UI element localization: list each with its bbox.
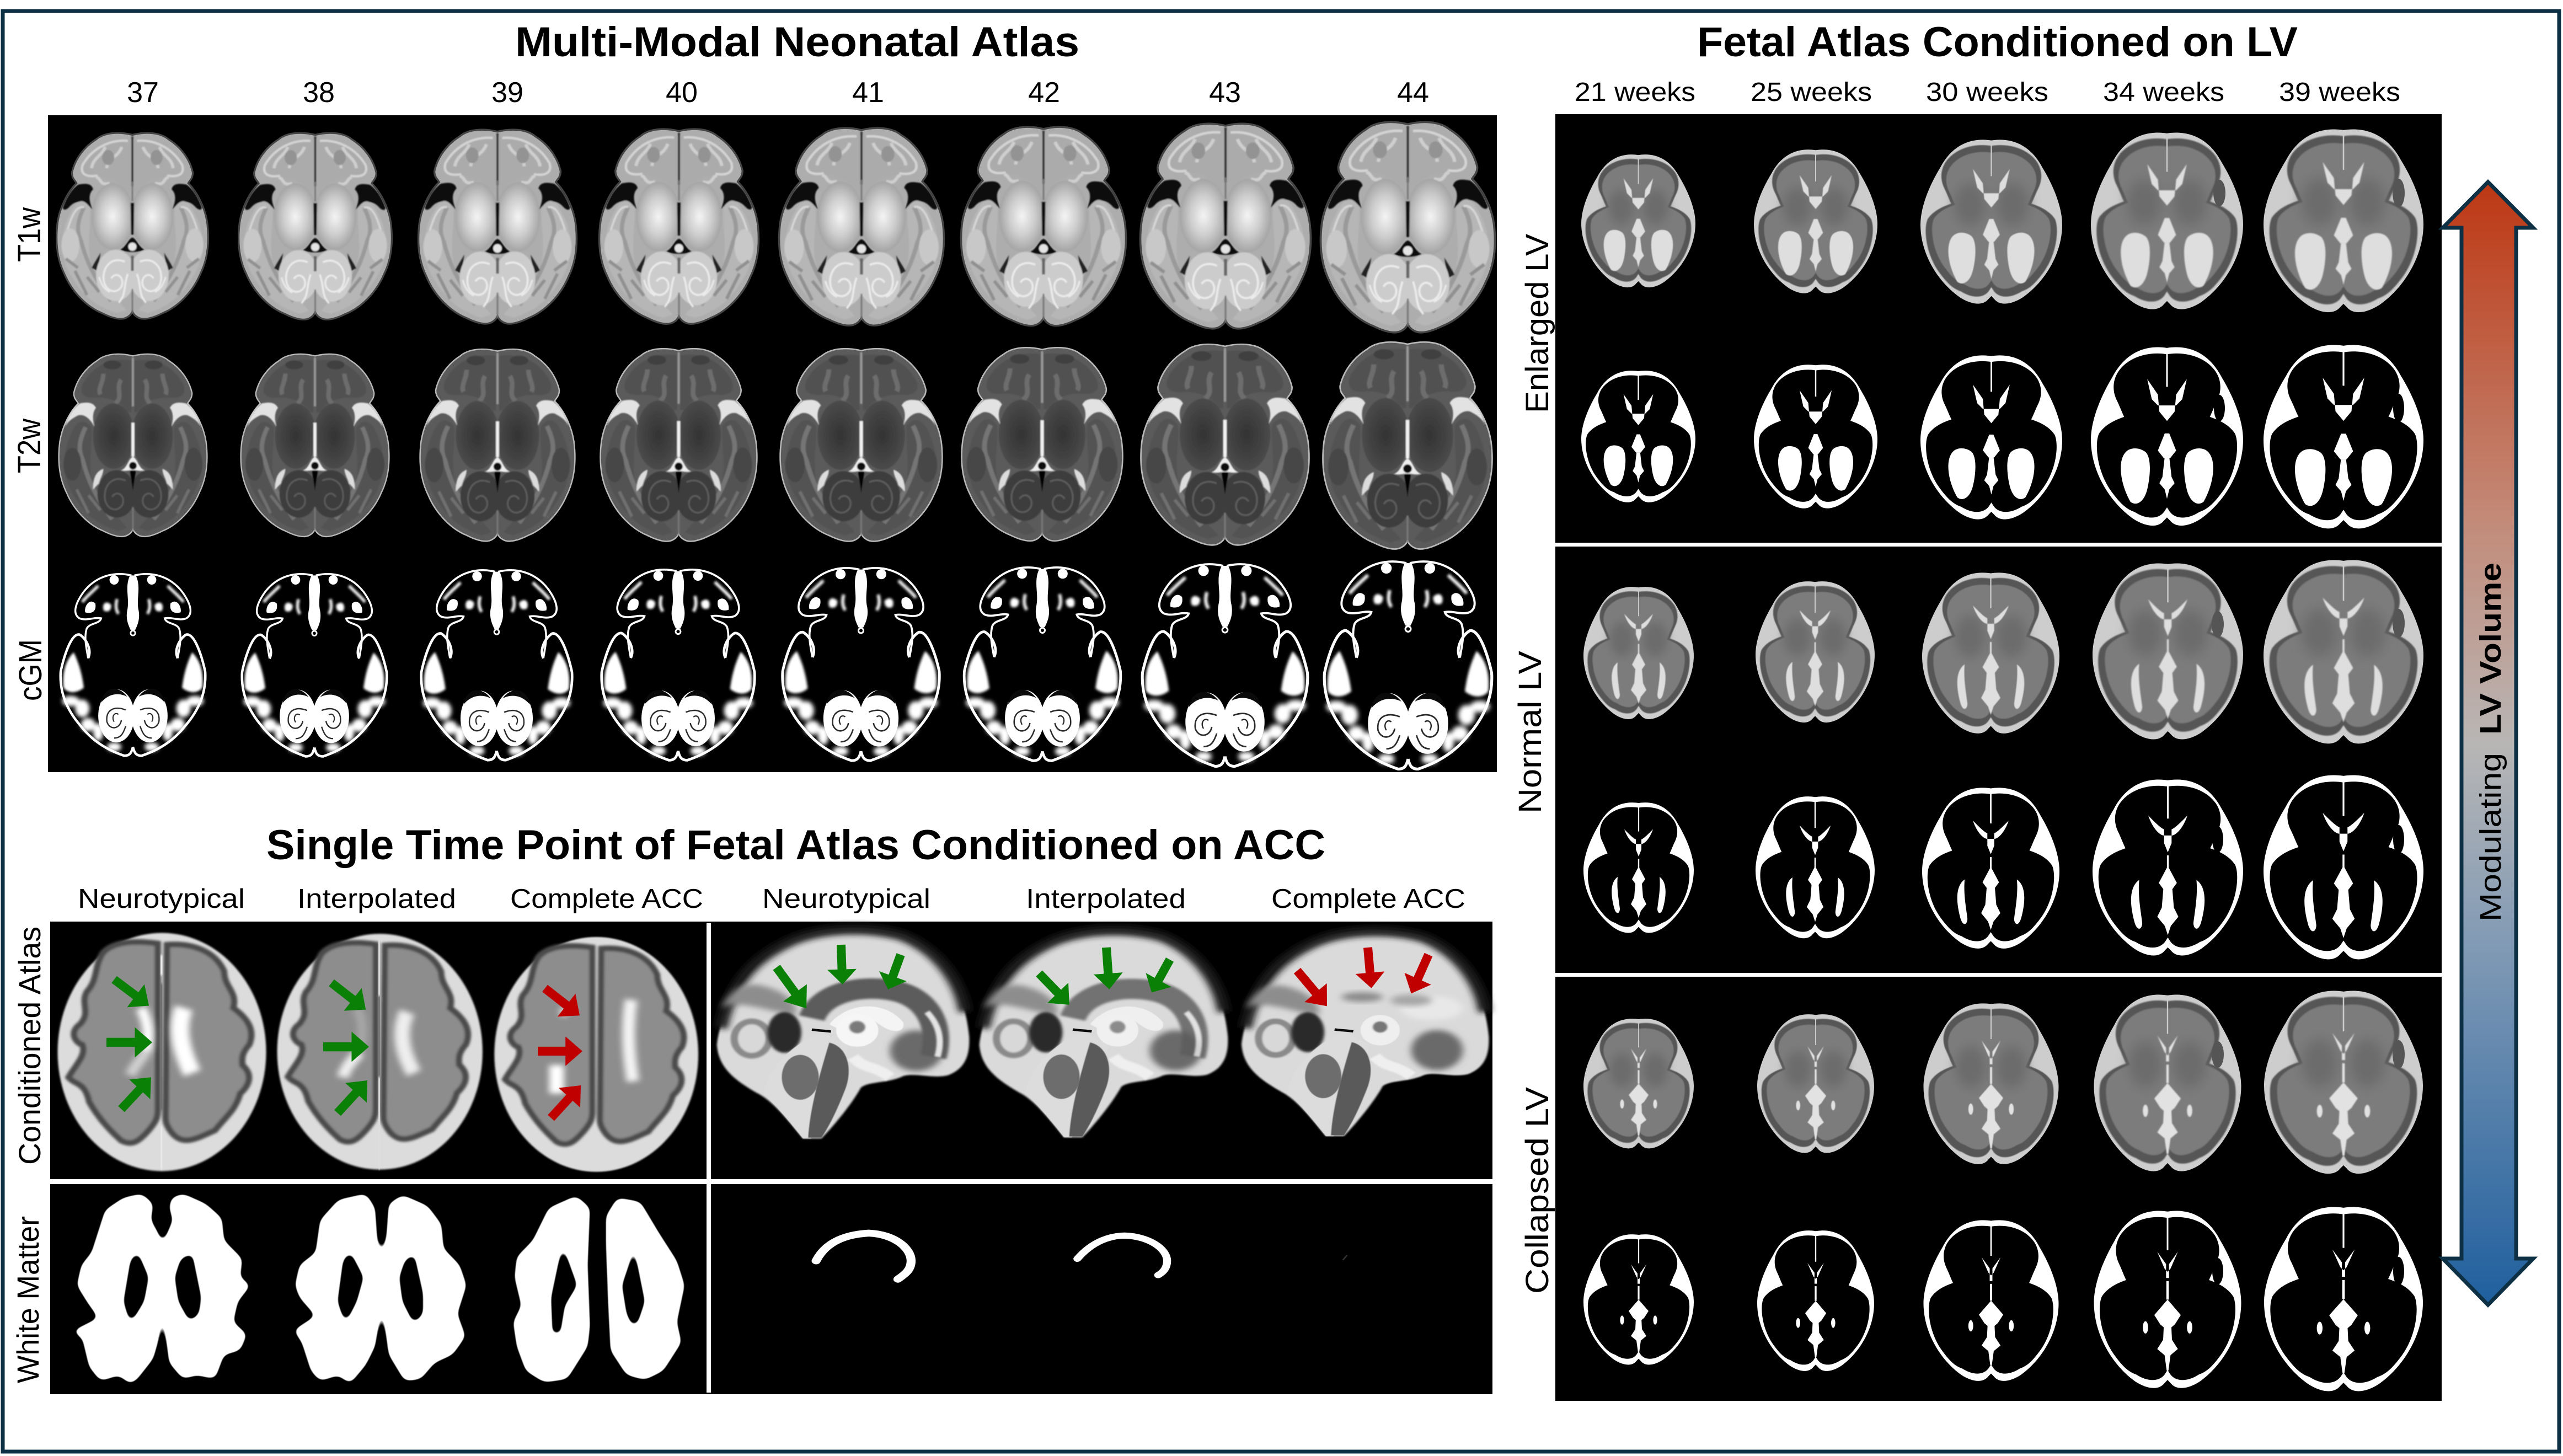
mask: corpus callosum interpolated: [1077, 1235, 1167, 1275]
age column labels: 39: [491, 77, 523, 109]
mask: WM neurotypical: [72, 1193, 250, 1384]
brain: sagittal complete ACC: [1242, 930, 1489, 1136]
age column labels: 40: [666, 77, 698, 109]
masks: normal: [1583, 775, 2423, 959]
ACC row labels: White Matter: [10, 1216, 45, 1383]
arrows: axial green and red: [105, 968, 592, 1128]
age column labels: 41: [852, 77, 884, 109]
week column labels: 39 weeks: [2279, 78, 2400, 107]
brain: axial complete ACC: [494, 937, 698, 1172]
panel: collapsed LV: [1555, 977, 2442, 1401]
row: T1w brains: [57, 122, 1495, 333]
divider lines: [707, 923, 711, 1393]
title: Fetal Atlas Conditioned on LV: Fetal Atlas Conditioned on LV: [1697, 19, 2298, 66]
age column labels: 44: [1397, 77, 1429, 109]
week column labels: 30 weeks: [1926, 78, 2048, 107]
row labels: neonatal modalities: [12, 207, 49, 701]
age column labels: 43: [1209, 77, 1241, 109]
mask: WM complete ACC: [513, 1196, 684, 1383]
age column labels: 38: [303, 77, 335, 109]
masks: enlarged: [1581, 345, 2423, 528]
brains: normal T2: [1583, 560, 2423, 743]
row: cGM masks: [61, 561, 1492, 769]
title: Single Time Point of Fetal Atlas Conditioned on ACC: Single Time Point of Fetal Atlas Conditioned on ACC: [266, 822, 1325, 869]
arrows: sagittal green and red: [765, 944, 1442, 1017]
mask: WM interpolated: [293, 1193, 467, 1384]
row labels: neonatal modalities: T1w: [12, 207, 47, 262]
brain: axial interpolated: [277, 934, 483, 1170]
age column labels: 42: [1028, 77, 1060, 109]
row labels: neonatal modalities: cGM: [13, 639, 49, 701]
masks: collapsed: [1583, 1207, 2423, 1391]
row labels: LV conditions: Normal LV: [1512, 651, 1548, 813]
row labels: LV conditions: [1512, 234, 1555, 1294]
row labels: neonatal modalities: T2w: [12, 418, 47, 473]
week column labels: [1575, 78, 2400, 107]
brain: sagittal interpolated: [980, 930, 1228, 1137]
ACC column labels: Interpolated: [297, 884, 456, 914]
ACC column labels: [78, 884, 1465, 914]
ACC column labels: Interpolated: [1026, 884, 1186, 914]
label: Modulating LV Volume: Modulating: [2474, 753, 2507, 922]
week column labels: 34 weeks: [2103, 78, 2224, 107]
sagittal brains: [717, 929, 1489, 1279]
axial conditioned atlas brains: [57, 933, 698, 1384]
brains: collapsed T2: [1583, 991, 2423, 1174]
row labels: LV conditions: Collapsed LV: [1519, 1087, 1555, 1294]
ACC column labels: Neurotypical: [78, 884, 245, 914]
label: Modulating LV Volume: [2474, 563, 2507, 922]
ACC row labels: Conditioned Atlas: [12, 927, 47, 1165]
age column labels: [127, 77, 1429, 109]
mask: corpus callosum neurotypical: [816, 1233, 911, 1279]
age column labels: 37: [127, 77, 159, 109]
ACC row labels: [10, 927, 47, 1383]
brains: enlarged T2: [1581, 130, 2423, 312]
brain: sagittal neurotypical: [717, 929, 969, 1138]
panel: normal LV: [1555, 547, 2442, 973]
white matter masks: [72, 1193, 684, 1384]
panel: enlarged LV: [1555, 114, 2442, 543]
ACC column labels: Neurotypical: [762, 884, 930, 914]
brain: axial neurotypical: [57, 933, 266, 1171]
row labels: LV conditions: Enlarged LV: [1519, 234, 1555, 413]
panel: neonatal atlas: [48, 115, 1497, 772]
week column labels: 25 weeks: [1751, 78, 1872, 107]
label: Modulating LV Volume: LV Volume: [2474, 563, 2507, 735]
title: Multi-Modal Neonatal Atlas: Multi-Modal Neonatal Atlas: [515, 19, 1079, 66]
week column labels: 21 weeks: [1575, 78, 1695, 107]
mask: corpus callosum absent trace: [1343, 1255, 1347, 1260]
ACC column labels: Complete ACC: [1271, 884, 1465, 914]
arrow: LV volume double-headed gradient: [2443, 182, 2533, 1305]
row: T2w brains: [59, 342, 1492, 549]
ACC column labels: Complete ACC: [510, 884, 703, 914]
panel: ACC atlas: [50, 922, 1492, 1394]
